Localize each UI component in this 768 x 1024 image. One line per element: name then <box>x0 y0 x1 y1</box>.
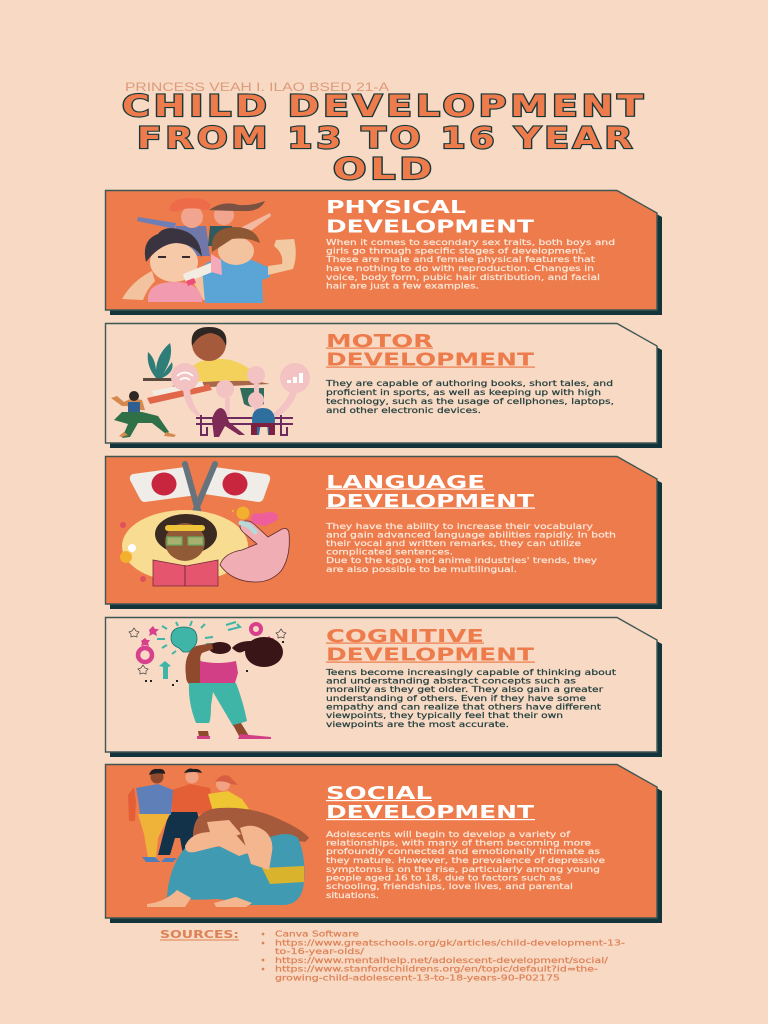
icon: thinking woman illustration <box>129 621 286 739</box>
text block: Adolescents will begin to develop a variety of <box>326 830 570 839</box>
text block: viewpoints are the most accurate. <box>326 720 509 729</box>
text block: When it comes to secondary sex traits, both boys and <box>326 238 615 247</box>
text block: and other electronic devices. <box>326 406 481 415</box>
icon: friends and sad girl illustration <box>128 768 309 907</box>
runner <box>111 396 145 410</box>
text block: proficient in sports, as well as keeping up with high <box>326 388 601 397</box>
icon: flags and reader illustration <box>120 464 289 586</box>
text block: girls go through specific stages of development. <box>326 246 586 256</box>
text block: Teens become increasingly capable of thinking about <box>325 668 616 677</box>
sources list <box>262 930 625 982</box>
panel: language development <box>106 456 662 609</box>
heading: DEVELOPMENT <box>326 492 534 512</box>
text block <box>326 830 605 900</box>
heading: LANGUAGE <box>326 473 485 493</box>
text block: have nothing to do with reproduction. Changes in <box>326 264 594 273</box>
front boy <box>202 258 270 303</box>
text block: Due to the kpop and anime industries' trends, they <box>326 556 598 565</box>
text block: profoundly connected and emotionally intimate as <box>326 847 600 856</box>
heading: DEVELOPMENT <box>326 803 534 823</box>
sad girl <box>193 808 309 864</box>
sources list: growing-child-adolescent-13-to-18-years-90-P02175 <box>275 974 560 982</box>
text block <box>325 379 614 415</box>
heading <box>326 473 535 512</box>
sources heading: SOURCES: <box>160 928 239 941</box>
panel: physical development <box>106 190 662 315</box>
text block: They have the ability to increase their vocabulary <box>325 522 594 531</box>
text block: These are male and female physical features that <box>325 255 595 264</box>
text block: complicated sentences. <box>326 548 453 556</box>
heading <box>326 198 534 238</box>
text block: voice, body form, pubic hair distribution, and facial <box>326 273 600 282</box>
text block: and gain advanced language abilities rapidly. In both <box>326 530 616 540</box>
text block: symptoms is on the rise, particularly among young <box>326 865 600 874</box>
heading: COGNITIVE <box>326 627 484 647</box>
heading: DEVELOPMENT <box>326 350 534 370</box>
heading <box>326 627 535 666</box>
text block: empathy and can realize that others have different <box>326 702 601 712</box>
sources list: Canva Software <box>275 930 359 938</box>
text block: are also possible to be multilingual. <box>326 565 517 574</box>
text block: people aged 16 to 18, due to factors such as <box>326 874 561 882</box>
text block: situations. <box>326 891 379 900</box>
author line: PRINCESS VEAH I. ILAO BSED 21-A <box>125 82 389 94</box>
panel: cognitive development <box>106 618 662 757</box>
sources list: https://www.greatschools.org/gk/articles/child-development-13- <box>275 938 625 948</box>
icon: teenagers illustration <box>122 198 296 303</box>
heading: DEVELOPMENT <box>326 646 534 666</box>
heading <box>326 784 535 823</box>
sources list: to-16-year-olds/ <box>275 947 365 956</box>
text block: understanding of others. Even if they have some <box>326 694 586 703</box>
heading: MOTOR <box>326 332 434 352</box>
text block: relationships, with many of them becoming more <box>326 838 591 848</box>
sources list: https://www.stanfordchildrens.org/en/topic/default?id=the- <box>275 964 598 974</box>
icon: student with devices illustration <box>111 327 310 438</box>
sources <box>160 928 625 982</box>
text block: their vocal and written remarks, they can utilize <box>326 539 581 548</box>
text block <box>325 668 616 729</box>
heading: DEVELOPMENT <box>326 218 534 238</box>
text block <box>325 238 615 290</box>
panel: social development <box>106 764 662 923</box>
text block: morality as they get older. They also gain a greater <box>326 685 604 694</box>
heading <box>326 332 535 370</box>
text block <box>325 522 616 574</box>
text block: They are capable of authoring books, short tales, and <box>325 379 613 388</box>
text block: and understanding abstract concepts such as <box>326 676 576 686</box>
text block: technology, such as the usage of cellphones, laptops, <box>326 397 614 406</box>
text block: they mature. However, the prevalence of depressive <box>326 856 605 865</box>
front girl <box>148 282 202 302</box>
text block: viewpoints, they typically feel that their own <box>326 711 563 720</box>
heading: SOCIAL <box>326 784 432 804</box>
text block: hair are just a few examples. <box>326 282 479 290</box>
title: FROM 13 TO 16 YEAR <box>137 121 636 155</box>
heading: PHYSICAL <box>326 198 466 218</box>
title <box>122 89 647 186</box>
sources list: https://www.mentalhelp.net/adolescent-development/social/ <box>275 956 609 965</box>
title: OLD <box>333 152 436 186</box>
text block: schooling, friendships, love lives, and parental <box>326 882 573 891</box>
panel: motor development <box>106 324 662 448</box>
title: CHILD DEVELOPMENT <box>122 89 647 123</box>
